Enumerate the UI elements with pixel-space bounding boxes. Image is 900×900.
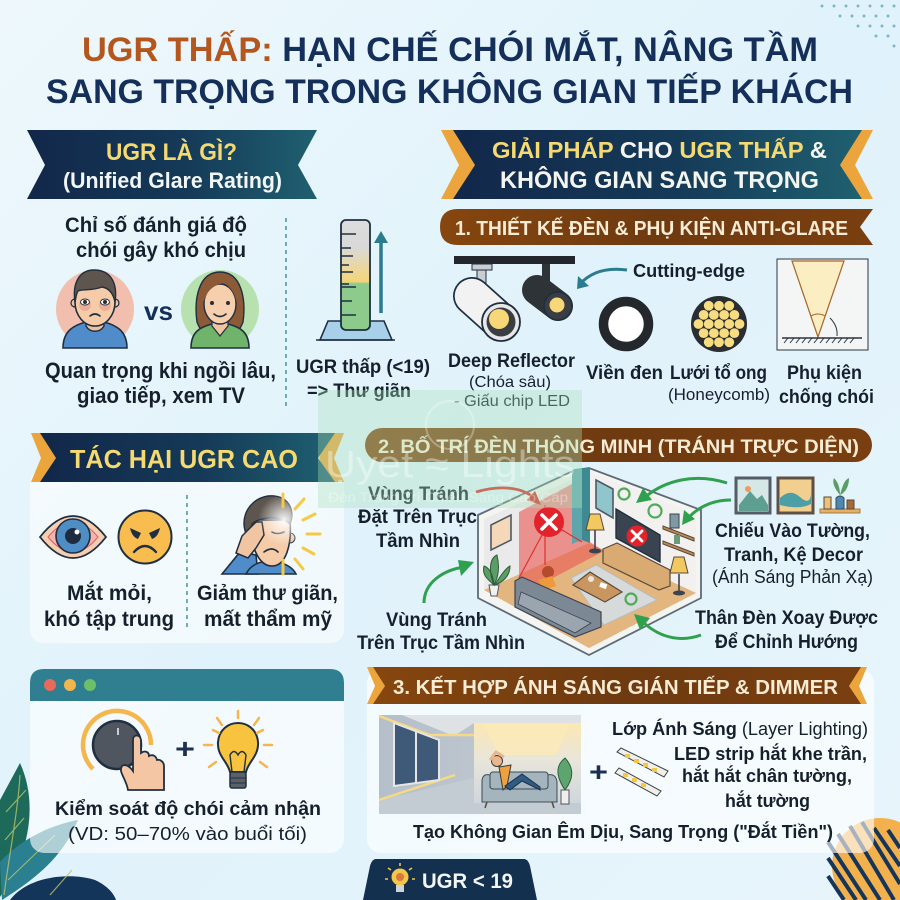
panel background	[367, 669, 874, 853]
title: SANG TRỌNG TRONG KHÔNG GIAN TIẾP KHÁCH	[46, 72, 853, 111]
arrow: red to glare zone	[476, 488, 541, 505]
icon: LED strip	[615, 748, 668, 796]
banner: section 3	[367, 667, 867, 704]
text: black trim: Viền đen	[586, 362, 663, 384]
text: layer lighting: Lớp Ánh Sáng (Layer Lighting)	[612, 718, 868, 739]
text: honeycomb: Lưới tổ ong	[670, 362, 767, 384]
text: honeycomb: (Honeycomb)	[668, 386, 770, 404]
banner: tác hại: TÁC HẠI UGR CAO	[70, 444, 298, 474]
banner: section 1: 1. THIẾT KẾ ĐÈN & PHỤ KIỆN ANTI-GLARE	[455, 216, 848, 240]
panel: UGR là gì	[27, 130, 430, 408]
banner: UGR là gì: (Unified Glare Rating)	[63, 168, 282, 193]
text: less relaxation: Giảm thư giãn,	[197, 582, 338, 605]
text: vs: vs	[144, 296, 173, 326]
text: avoid zone 2	[357, 610, 525, 654]
text: adjustable body	[695, 607, 878, 653]
icon: coffee table	[573, 572, 622, 602]
text: anti-glare accessory	[779, 362, 874, 408]
icon: plant	[483, 555, 510, 596]
arrow: green to shelf	[682, 500, 731, 525]
window header	[30, 669, 344, 701]
icon: track lights	[454, 256, 575, 341]
text: avoid zone 1: Vùng Tránh	[368, 484, 469, 505]
text: avoid zone 1: Đặt Trên Trục	[358, 507, 477, 528]
text: plus: +	[175, 733, 195, 764]
banner: UGR là gì	[27, 130, 317, 199]
icon: wall shelves	[663, 514, 694, 556]
text: aim at walls	[712, 520, 873, 587]
watermark	[318, 390, 582, 508]
text: less relaxation	[197, 582, 338, 631]
text: low UGR	[296, 356, 430, 402]
text: eye strain	[44, 581, 174, 631]
watermark: Đèn Trang Trí Chiếu Sáng Cao Cấp	[328, 489, 568, 505]
text: led strip: hắt tường	[725, 790, 810, 811]
icon: lamps	[586, 514, 688, 596]
illustration: isometric living room	[478, 468, 701, 655]
icon: person hit by glare	[222, 494, 320, 574]
icon: light bulb	[204, 711, 272, 788]
text: honeycomb	[668, 362, 770, 404]
banner: tác hại	[31, 433, 344, 482]
text: definition: chói gây khó chịu	[76, 239, 246, 262]
decorative leaves bottom left	[0, 763, 116, 900]
text: importance	[45, 358, 276, 408]
text: eye strain: khó tập trung	[44, 608, 174, 631]
text: less relaxation: mất thẩm mỹ	[204, 608, 332, 631]
banner: section 3: 3. KẾT HỢP ÁNH SÁNG GIÁN TIẾP & DIMMER	[393, 676, 838, 699]
text: avoid zone 2: Vùng Tránh	[386, 610, 487, 631]
text: anti-glare accessory: chống chói	[779, 386, 874, 408]
banner: UGR là gì: UGR LÀ GÌ?	[106, 138, 237, 166]
text: adjustable body: Để Chỉnh Hướng	[715, 631, 858, 653]
text: avoid zone 2: Trên Trục Tầm Nhìn	[357, 633, 525, 654]
text: deep reflector: Deep Reflector	[448, 351, 576, 372]
text: avoid zone 1	[358, 484, 477, 552]
text: led strip: hắt hắt chân tường,	[682, 765, 852, 786]
icon: red eye	[40, 516, 106, 558]
text: led strip	[674, 743, 867, 811]
arrow: green to floor	[634, 614, 701, 638]
banner: section 2	[365, 428, 872, 462]
title: UGR THẤP: HẠN CHẾ CHÓI MẮT, NÂNG TẦM	[82, 31, 818, 69]
panel background	[30, 470, 344, 643]
panel: bố trí đèn	[357, 428, 878, 655]
icon: tired man	[56, 270, 134, 348]
icon: black trim	[604, 302, 648, 346]
icon: dimmer knob and hand	[83, 711, 164, 790]
text: low UGR: UGR thấp (<19)	[296, 356, 430, 378]
diagram: anti-glare angle	[777, 259, 868, 350]
icon: UGR gauge	[316, 220, 395, 340]
badge: UGR below 19: UGR < 19	[422, 870, 513, 893]
text: perceived glare control	[55, 798, 321, 844]
text: definition: Chỉ số đánh giá độ	[65, 214, 247, 237]
text: low UGR: => Thư giãn	[307, 380, 411, 402]
icon: sofa and person	[515, 566, 601, 637]
icon: wall art and shelf	[736, 478, 860, 513]
text: aim at walls: Tranh, Kệ Decor	[724, 544, 863, 566]
icon: honeycomb	[691, 296, 747, 352]
banner: giải pháp	[441, 130, 873, 199]
panel: giải pháp	[440, 130, 874, 410]
title	[46, 31, 853, 111]
text: deep reflector	[448, 351, 576, 410]
panel: tác hại	[30, 433, 344, 643]
text: aim at walls: Chiếu Vào Tường,	[715, 520, 870, 542]
illustration: indirect lit room	[379, 715, 581, 814]
text: cutting-edge: Cutting-edge	[633, 260, 745, 281]
text: adjustable body: Thân Đèn Xoay Được	[695, 607, 878, 629]
text: led strip: LED strip hắt khe trần,	[674, 743, 867, 764]
banner: giải pháp: GIẢI PHÁP CHO UGR THẤP &	[492, 135, 827, 163]
decorative circle and stripes bottom right	[828, 818, 900, 900]
red glare zone	[519, 484, 604, 590]
text: anti-glare accessory: Phụ kiện	[787, 362, 862, 384]
watermark: Ụyet ≈ Lights	[325, 444, 575, 486]
badge: UGR below 19	[363, 859, 537, 900]
icon: small bulb	[385, 863, 415, 892]
icon: x mark glare zone	[534, 507, 564, 537]
arrow: green to wall	[636, 478, 727, 503]
text: aim at walls: (Ánh Sáng Phản Xạ)	[712, 567, 873, 587]
arrow: cutting-edge	[577, 269, 627, 289]
banner: section 2: 2. BỐ TRÍ ĐÈN THÔNG MINH (TRÁNH TRỰC DIỆN)	[378, 434, 859, 458]
text: importance: giao tiếp, xem TV	[77, 383, 245, 408]
banner: giải pháp: KHÔNG GIAN SANG TRỌNG	[500, 166, 819, 194]
banner: section 1	[440, 209, 873, 245]
text: definition	[65, 214, 247, 262]
decorative dots top right	[820, 4, 896, 48]
icon: tv	[616, 509, 660, 562]
panel: dimmer	[30, 669, 344, 853]
text: perceived glare control: Kiểm soát độ chói cảm nhận	[55, 798, 321, 820]
panel: ánh sáng gián tiếp	[367, 667, 874, 853]
icon: angry face	[118, 510, 172, 564]
text: perceived glare control: (VD: 50–70% vào buổi tối)	[68, 823, 307, 844]
panel background	[30, 669, 344, 853]
text: summary: Tạo Không Gian Êm Dịu, Sang Trọng ("Đắt Tiền")	[413, 821, 833, 842]
text: eye strain: Mắt mỏi,	[67, 581, 152, 605]
text: avoid zone 1: Tầm Nhìn	[376, 531, 460, 552]
arrow: green to room	[424, 560, 474, 603]
text: importance: Quan trọng khi ngồi lâu,	[45, 358, 276, 383]
icon: relaxed woman	[181, 270, 259, 348]
text: plus: +	[589, 757, 608, 787]
text: deep reflector: - Giấu chip LED	[454, 393, 570, 410]
text: deep reflector: (Chóa sâu)	[469, 374, 551, 391]
